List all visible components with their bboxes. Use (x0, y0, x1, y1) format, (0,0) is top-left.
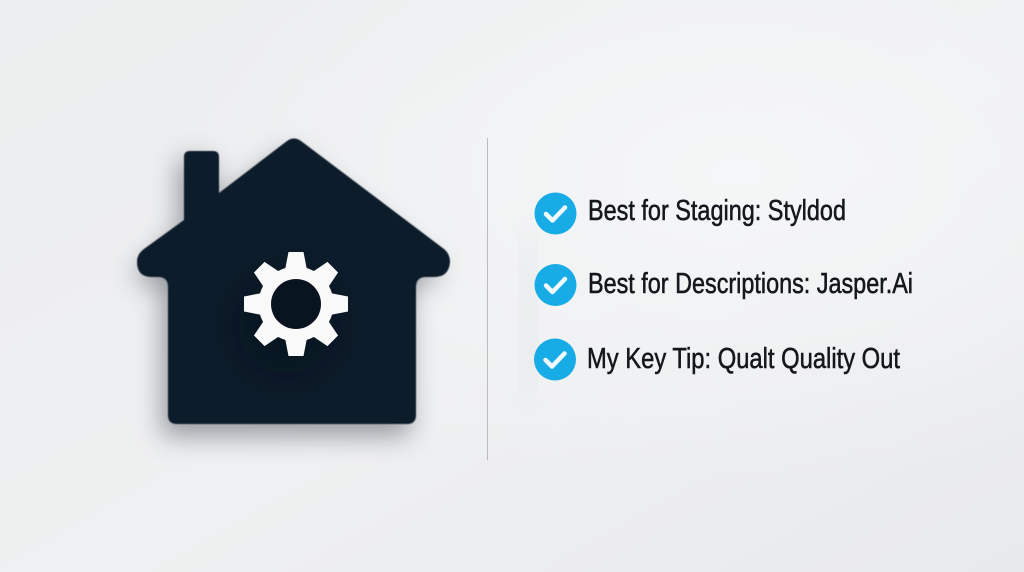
soft shadow behind checklist icons (524, 240, 532, 390)
item: best for staging: Best for Staging: Styldod (588, 195, 846, 227)
icon: gear (244, 252, 348, 356)
vertical divider (487, 138, 488, 460)
checklist (524, 192, 913, 390)
item: best for descriptions: Best for Descriptions: Jasper.Ai (588, 268, 913, 300)
house silhouette (137, 138, 450, 424)
gear shadow (238, 278, 334, 374)
item: my key tip: My Key Tip: Qualt Quality Out (587, 343, 900, 375)
house shadow (131, 150, 444, 436)
item: best for staging (534, 192, 846, 234)
icon: house with gear (131, 138, 450, 436)
item: my key tip (534, 338, 900, 380)
item: best for descriptions (534, 264, 913, 306)
